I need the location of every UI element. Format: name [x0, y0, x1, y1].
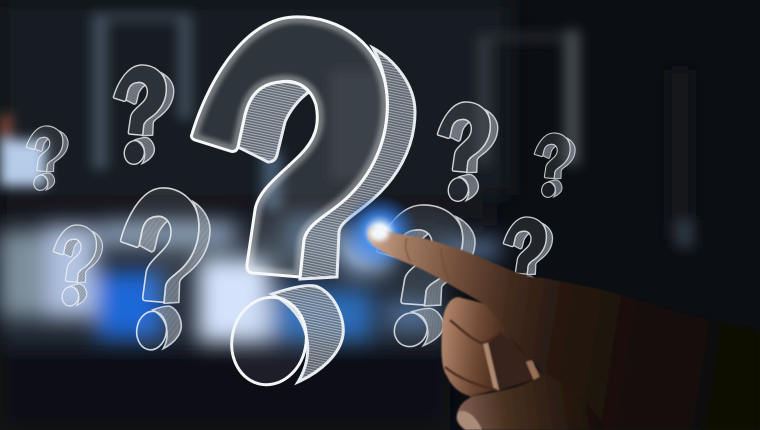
icon: small question mark, behind hand	[503, 217, 552, 299]
curled middle finger	[442, 297, 540, 396]
fingertip highlight	[369, 225, 389, 241]
hand	[368, 225, 760, 430]
knuckle creases	[445, 320, 500, 390]
icon: large question mark	[191, 17, 415, 392]
icon: medium question mark touched by finger	[377, 205, 475, 349]
icon: small question mark, lower left	[53, 225, 102, 307]
finger gap highlight	[483, 343, 499, 390]
thumb	[456, 374, 605, 430]
finger joint crease	[406, 238, 449, 281]
icon: small question mark, far left	[26, 126, 68, 192]
back of hand and pointing finger	[368, 227, 760, 430]
finger glow	[342, 194, 418, 270]
thumbnail	[457, 411, 482, 430]
icon: medium question mark, left	[121, 188, 210, 353]
gap between fingers	[483, 332, 543, 391]
icon: small question mark, right	[437, 102, 498, 203]
gap highlight near palm	[526, 360, 541, 383]
icon: small question mark, upper left	[113, 65, 174, 166]
icon: small question mark, far right	[534, 133, 575, 199]
